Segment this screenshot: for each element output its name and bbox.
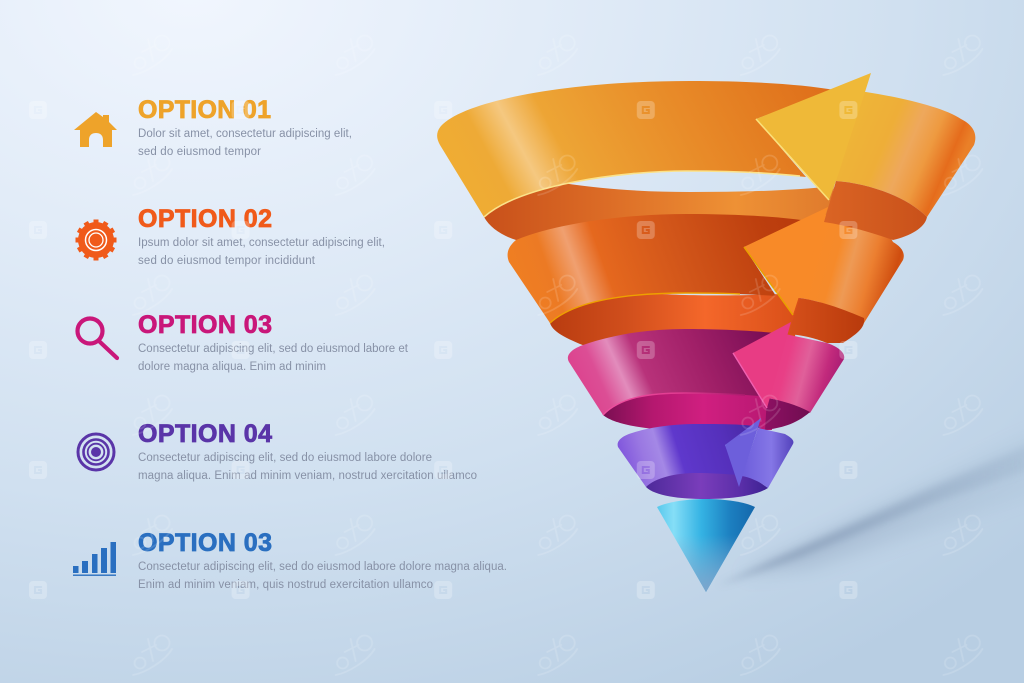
- option 2 text: Ipsum dolor sit amet, consectetur adipiscing elit,: [138, 237, 385, 249]
- icon: magnifier: [78, 318, 117, 358]
- option 1 text: [138, 128, 352, 158]
- option 4 text: magna aliqua. Enim ad minim veniam, nostrud xercitation ullamco: [138, 470, 477, 482]
- funnel inner back band 1: [484, 183, 834, 250]
- icon: gear: [76, 220, 116, 260]
- option 5 text: Enim ad minim veniam, quis nostrud exercitation ullamco: [138, 579, 433, 591]
- option 3 text: [138, 343, 409, 373]
- funnel ribbon 2 front: [508, 214, 801, 323]
- funnel tip cone: [657, 499, 755, 592]
- funnel inner back band 3: [603, 385, 772, 431]
- option 1 row: [74, 96, 352, 158]
- funnel inner right band 1: [824, 181, 927, 240]
- option 3 text: Consectetur adipiscing elit, sed do eiusmod labore et: [138, 343, 409, 355]
- funnel ribbon 4 front: [618, 424, 761, 487]
- option 1 heading: OPTION 01: [138, 96, 271, 124]
- option 2 row: [76, 205, 385, 267]
- funnel ribbon 1 front: [437, 81, 835, 217]
- icon: house: [74, 112, 117, 147]
- option 5 text: [138, 561, 507, 591]
- funnel ribbon 3 front: [568, 329, 788, 415]
- funnel ribbon 1 right: [832, 92, 975, 217]
- option 3 heading: OPTION 03: [138, 311, 272, 339]
- option 3 row: [78, 311, 409, 373]
- option 5 heading: OPTION 03: [138, 529, 272, 557]
- option 2 text: sed do eiusmod tempor incididunt: [138, 255, 316, 267]
- option 2 heading: OPTION 02: [138, 205, 272, 233]
- arrow 3 pink: [733, 322, 791, 408]
- icon: target: [78, 434, 114, 470]
- option 1 text: sed do eiusmod tempor: [138, 146, 261, 158]
- funnel inner back band 2: [550, 290, 800, 352]
- option 4 text: [138, 452, 477, 482]
- arrow 2 orange: [744, 207, 828, 315]
- funnel ribbon 4 right: [742, 428, 793, 488]
- option 5 text: Consectetur adipiscing elit, sed do eiusmod labore dolore magna aliqua.: [138, 561, 507, 573]
- icon: bar chart: [73, 542, 116, 576]
- option 2 text: [138, 237, 385, 267]
- funnel inner back band 4: [646, 465, 768, 499]
- option 4 text: Consectetur adipiscing elit, sed do eiusmod labore dolore: [138, 452, 432, 464]
- arrow 1 yellow: [756, 73, 871, 200]
- option 4 row: [78, 420, 477, 482]
- funnel drop shadow: [717, 430, 1024, 586]
- arrow 4 violet: [725, 418, 761, 487]
- funnel ribbon 3 right: [767, 334, 844, 413]
- ribbon 2 lower edge highlight: [550, 293, 740, 323]
- ribbon 3 lower edge highlight: [603, 393, 745, 415]
- funnel inner right band 2: [788, 298, 864, 343]
- option 4 heading: OPTION 04: [138, 420, 272, 448]
- option 1 text: Dolor sit amet, consectetur adipiscing elit,: [138, 128, 352, 140]
- option 5 row: [73, 529, 507, 591]
- funnel inner right band 3: [765, 398, 810, 430]
- funnel ribbon 2 right: [794, 214, 904, 323]
- option 3 text: dolore magna aliqua. Enim ad minim: [138, 361, 326, 373]
- ribbon 1 lower edge highlight: [484, 171, 800, 217]
